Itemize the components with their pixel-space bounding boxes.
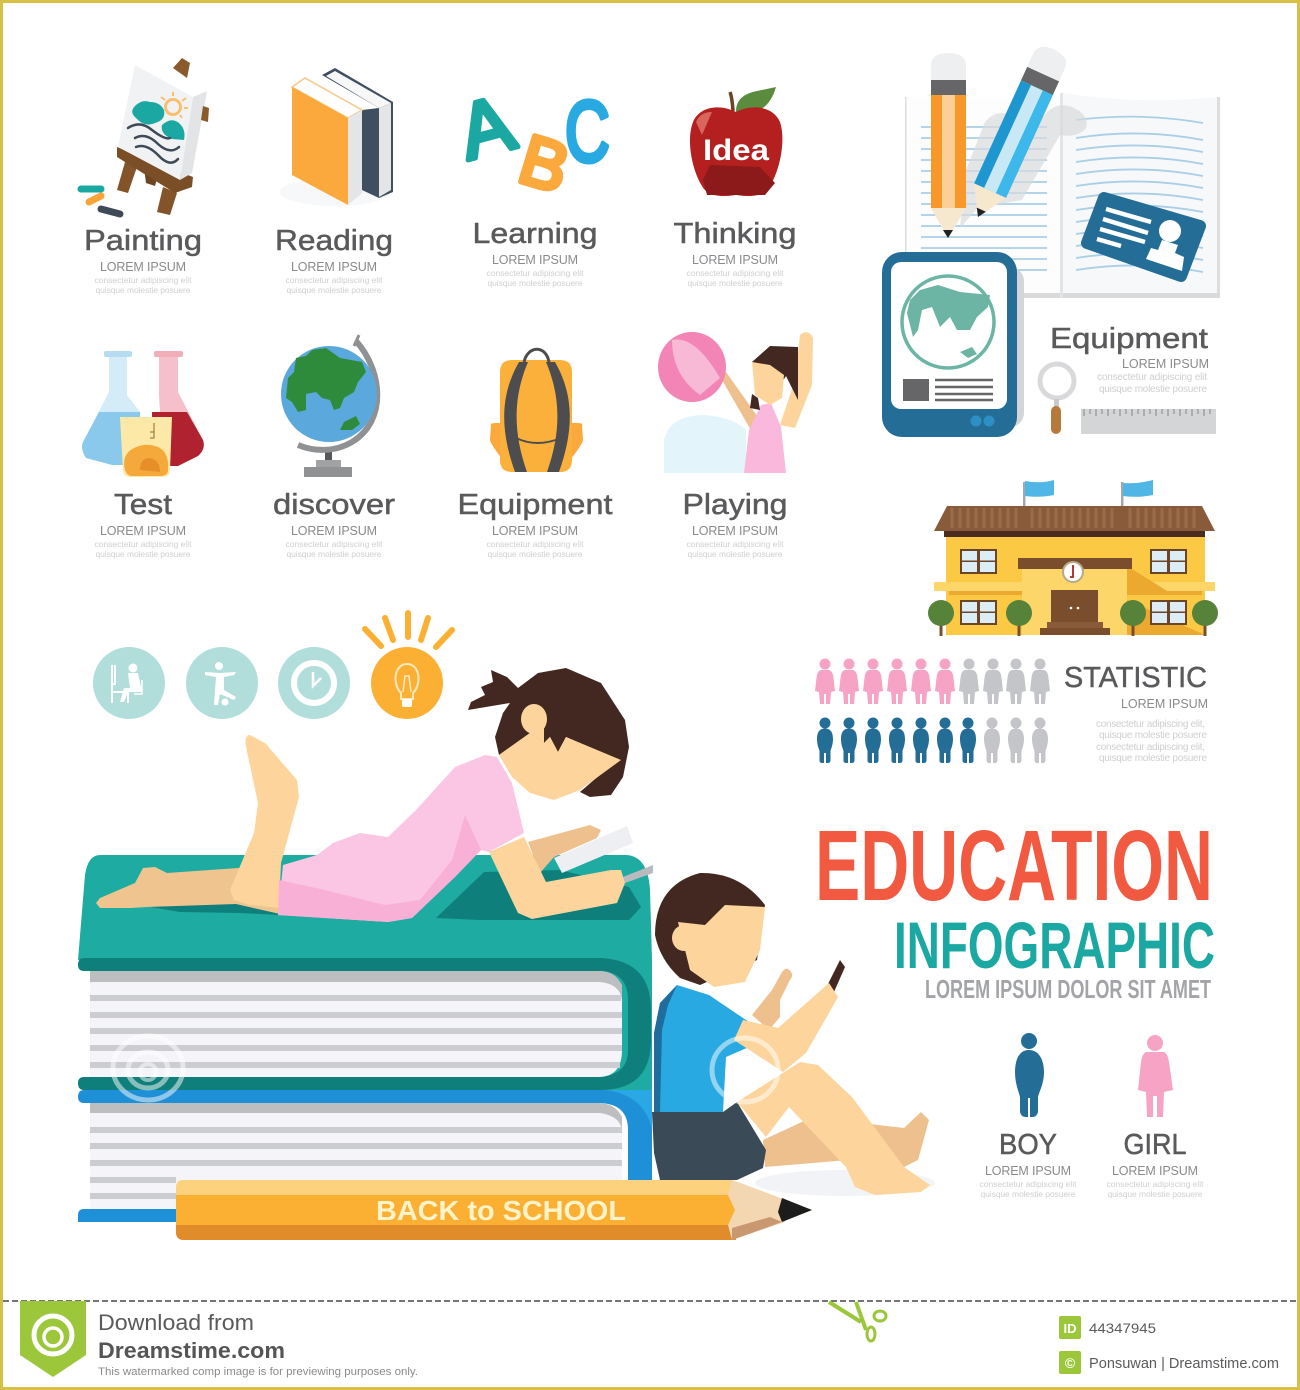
panel: Learning (450, 78, 610, 288)
icon: scissors (829, 1302, 886, 1341)
caption: Learning: quisque molestie posuere (488, 278, 583, 288)
caption: Equipment: consectetur adipiscing elit (1097, 372, 1207, 383)
caption: Painting (94, 260, 192, 295)
panel: discover (273, 335, 395, 559)
phone (826, 960, 845, 992)
footer: stock photo strip (3, 1301, 1297, 1378)
caption: statistic: quisque molestie posuere (1099, 753, 1207, 764)
heading: discover: discover (273, 489, 395, 521)
icon: tablet (882, 252, 1024, 437)
caption: discover: consectetur adipiscing elit (286, 539, 383, 549)
caption: statistic: consectetur adipiscing elit, (1096, 742, 1205, 753)
icon: apple: Idea (703, 134, 769, 167)
dress (278, 755, 524, 922)
heading: BOY: BOY (999, 1129, 1057, 1161)
heading: Playing: Playing (682, 489, 788, 521)
heading: Reading: Reading (275, 225, 393, 257)
caption: Test: LOREM IPSUM (100, 524, 186, 538)
icon: orange pencil (931, 53, 966, 238)
icon: open notebook (905, 93, 1220, 298)
icon: ID badge (1059, 1316, 1081, 1339)
caption: boy: consectetur adipiscing elit (980, 1179, 1077, 1189)
panel: Playing (658, 332, 813, 559)
icon: ID badge: ID (1064, 1321, 1076, 1336)
caption: Reading: quisque molestie posuere (286, 285, 382, 295)
caption: Painting: LOREM IPSUM (100, 260, 186, 274)
text: download from: Download from (98, 1310, 254, 1335)
front leg (737, 1062, 930, 1195)
caption: statistic (1096, 697, 1208, 764)
face and hair (655, 873, 765, 987)
caption: Test: consectetur adipiscing elit (94, 539, 192, 549)
icon: boy figure (1015, 1033, 1044, 1117)
caption: Thinking: quisque molestie posuere (688, 278, 783, 288)
icon: clock (278, 647, 350, 719)
icon: ABC letters: C (565, 83, 610, 179)
icon: ruler (1081, 409, 1216, 434)
bottom book (blue) (78, 1090, 652, 1222)
caption: discover: LOREM IPSUM (291, 524, 377, 538)
panel: Thinking (674, 87, 796, 288)
caption: Equipment (486, 524, 584, 559)
caption: Learning: LOREM IPSUM (492, 253, 578, 267)
icon: school building (928, 480, 1218, 636)
watermark spirals (113, 1036, 778, 1102)
caption: Test: quisque molestie posuere (96, 549, 191, 559)
back hand (752, 969, 792, 1030)
caption: girl: quisque molestie posuere (1108, 1189, 1203, 1199)
caption: Thinking: LOREM IPSUM (692, 253, 778, 267)
icon: child playing ball (658, 332, 813, 473)
chart: blue figures row (817, 718, 1048, 763)
text: watermark notice: This watermarked comp image is for previewing purposes only. (98, 1366, 418, 1378)
icon: globe (281, 335, 377, 477)
caption: Playing: quisque molestie posuere (688, 549, 783, 559)
icon: ABC letters (450, 78, 610, 208)
icon: soccer player (186, 647, 258, 719)
caption: boy: quisque molestie posuere (980, 1189, 1076, 1199)
illustration: stack of books (78, 855, 652, 1222)
caption: discover (286, 524, 383, 559)
heading: STATISTIC: STATISTIC (1064, 662, 1207, 694)
caption: Equipment (1097, 357, 1209, 395)
icon: easel (81, 58, 209, 215)
back leg (763, 1112, 929, 1167)
shirt (654, 985, 772, 1112)
icon: green ribbon (20, 1301, 86, 1377)
caption: girl: consectetur adipiscing elit (1106, 1179, 1204, 1189)
illustration: girl reading (96, 668, 653, 922)
heading: Equipment: Equipment (1050, 323, 1208, 355)
caption: Test (94, 524, 192, 559)
heading: Painting: Painting (84, 225, 202, 257)
panel: girl (1106, 1035, 1204, 1199)
caption: Learning: consectetur adipiscing elit (486, 268, 584, 278)
caption: discover: quisque molestie posuere (286, 549, 382, 559)
text: Dreamstime.com: Dreamstime.com (98, 1338, 285, 1363)
floor shadow (755, 1170, 935, 1196)
panel: boy (980, 1033, 1077, 1199)
icon: girl figure (1138, 1035, 1173, 1117)
front arm (734, 983, 838, 1072)
illustration: boy reading phone (652, 873, 935, 1196)
icon: flasks (82, 351, 204, 477)
caption: Equipment: consectetur adipiscing elit (486, 539, 584, 549)
top book (teal) (78, 855, 652, 1090)
caption: girl: LOREM IPSUM (1112, 1164, 1198, 1178)
raised leg (230, 735, 299, 908)
caption: Painting: consectetur adipiscing elit (94, 275, 192, 285)
shorts (652, 1102, 766, 1180)
panel: Equipment backpack (458, 349, 612, 559)
text: author: Ponsuwan | Dreamstime.com (1089, 1355, 1279, 1372)
caption: boy: LOREM IPSUM (985, 1164, 1071, 1178)
icon: ABC letters: B (511, 120, 578, 208)
caption: Equipment: LOREM IPSUM (1122, 357, 1209, 371)
icon: copyright badge (1059, 1351, 1081, 1374)
heading: Equipment: Equipment (458, 489, 612, 521)
icon: studying at desk (93, 647, 165, 719)
caption: Playing: consectetur adipiscing elit (686, 539, 784, 549)
text: image ID: 44347945 (1089, 1320, 1156, 1336)
caption: Playing: LOREM IPSUM (692, 524, 778, 538)
heading: GIRL: GIRL (1124, 1129, 1186, 1161)
caption: statistic: consectetur adipiscing elit, (1096, 719, 1205, 730)
caption: Learning (486, 253, 584, 288)
caption: Equipment: quisque molestie posuere (1099, 384, 1207, 395)
icon: apple (690, 87, 782, 196)
heading: Learning: Learning (472, 218, 598, 250)
caption: Equipment: LOREM IPSUM (492, 524, 578, 538)
caption: Thinking (686, 253, 784, 288)
caption: boy (980, 1164, 1077, 1199)
heading: Test: Test (114, 489, 172, 521)
caption: statistic: quisque molestie posuere (1099, 730, 1207, 741)
illustration: BACK to SCHOOL pencil: BACK to SCHOOL (376, 1195, 626, 1226)
face (499, 704, 621, 800)
panel: Painting (81, 58, 209, 295)
icon row: activity circles (93, 613, 452, 719)
icon: ABC letters: A (450, 78, 523, 176)
icon: magnifying glass (1040, 364, 1074, 434)
caption: Thinking: consectetur adipiscing elit (686, 268, 784, 278)
icon: backpack (490, 349, 583, 472)
panel: statistic (815, 658, 1208, 764)
illustration: BACK to SCHOOL pencil (176, 1180, 812, 1240)
panel: Equipment open notebook and tools (882, 42, 1220, 437)
caption: Playing (686, 524, 784, 559)
front arm (489, 837, 625, 919)
caption: Reading: LOREM IPSUM (291, 260, 377, 274)
icon: copyright badge: © (1065, 1355, 1076, 1371)
icon: lightbulb (365, 613, 452, 719)
panel: Reading (275, 68, 393, 295)
icon: blue pencil (962, 42, 1070, 224)
icon: books (280, 68, 393, 206)
hair (468, 668, 629, 797)
caption: Reading: consectetur adipiscing elit (286, 275, 383, 285)
panel: Test (82, 351, 204, 559)
chart: pink figures row (815, 658, 1050, 704)
caption: statistic: LOREM IPSUM (1121, 697, 1208, 711)
caption: Equipment: quisque molestie posuere (488, 549, 583, 559)
caption: girl (1106, 1164, 1204, 1199)
icon: ID card (1087, 198, 1200, 276)
back leg (96, 866, 280, 914)
open book held (554, 826, 653, 883)
caption: Reading (286, 260, 383, 295)
back arm (528, 825, 601, 873)
heading: Thinking: Thinking (674, 218, 796, 250)
caption: Painting: quisque molestie posuere (96, 285, 191, 295)
